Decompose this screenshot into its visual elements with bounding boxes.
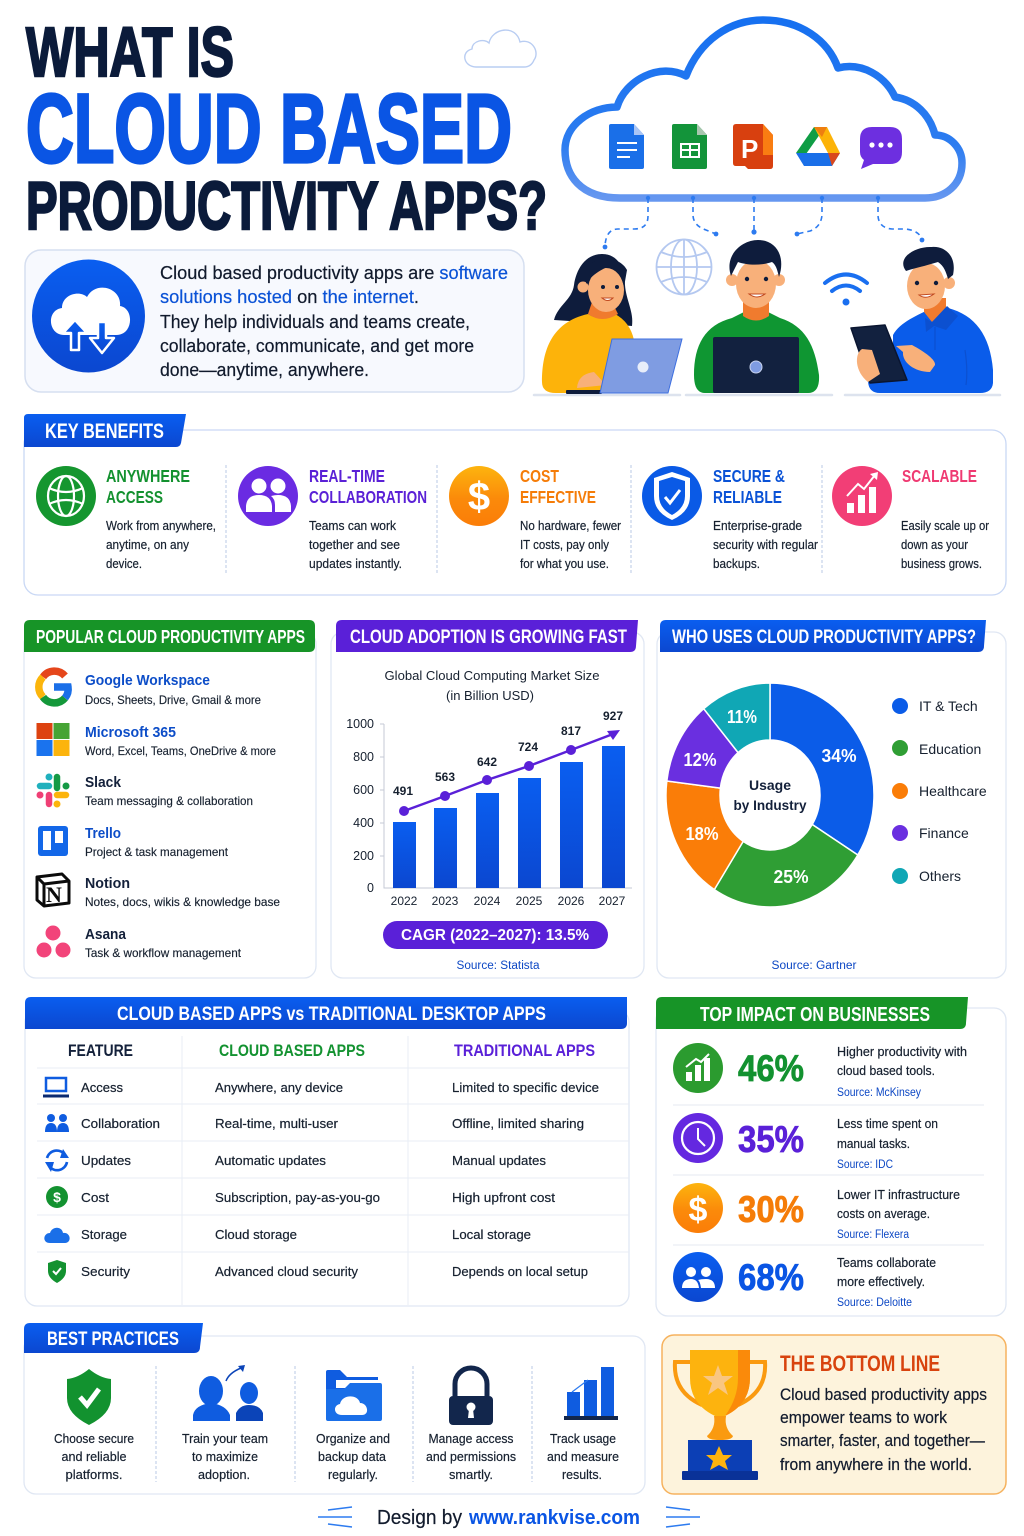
x axis labels: 2023 — [432, 894, 459, 908]
heading: impact — [656, 997, 968, 1029]
callout: CAGR: CAGR (2022–2027): 13.5% — [401, 927, 589, 944]
heading: popular apps: POPULAR CLOUD PRODUCTIVITY APPS — [36, 626, 305, 647]
title: CLOUD BASED — [26, 74, 512, 183]
chart title: (in Billion USD) — [446, 688, 534, 703]
benefit: secure and reliable: Enterprise-grade — [713, 518, 802, 533]
row: access — [43, 1078, 599, 1096]
heading: comparison: CLOUD BASED APPS vs TRADITIONAL DESKTOP APPS — [117, 1003, 546, 1025]
app: slack — [36, 774, 253, 808]
title — [26, 13, 547, 244]
practice: secure platforms — [54, 1369, 134, 1482]
stat: 46%: 46% — [738, 1048, 804, 1089]
illustration: woman with laptop — [542, 254, 682, 394]
legend: IT & Tech — [919, 698, 978, 714]
practice: secure platforms: and reliable — [62, 1449, 126, 1464]
practice: track usage: results. — [562, 1467, 602, 1482]
row: cost: Cost — [81, 1190, 109, 1205]
benefit: scalable: Easily scale up or — [901, 518, 990, 533]
trend line: 491 — [393, 784, 413, 798]
practice: train team — [182, 1365, 268, 1482]
row: cost: Subscription, pay-as-you-go — [215, 1190, 380, 1205]
y axis: 0 — [367, 881, 374, 895]
row: security: Depends on local setup — [452, 1264, 588, 1279]
stat: 35%: Less time spent on — [837, 1116, 938, 1131]
practice: organize data: Organize and — [316, 1431, 390, 1446]
x axis labels: 2022 — [391, 894, 418, 908]
icon: wifi — [825, 274, 867, 306]
text block: definition: They help individuals and teams create, — [160, 312, 470, 332]
column headers: FEATURE — [68, 1042, 133, 1060]
panel: who uses cloud apps — [657, 620, 1006, 978]
benefit: anywhere access: device. — [106, 556, 142, 571]
practice: track usage: Track usage — [550, 1431, 616, 1446]
legend: Others — [919, 868, 961, 884]
practice: manage access: and permissions — [426, 1449, 516, 1464]
benefit: secure and reliable: SECURE & — [713, 466, 785, 486]
row: cost — [46, 1186, 555, 1208]
heading: popular apps — [24, 620, 315, 652]
panel: the bottom line: THE BOTTOM LINE — [780, 1351, 940, 1376]
illustration: cloud with app icons — [565, 20, 962, 198]
benefit: real-time collaboration: COLLABORATION — [309, 487, 427, 507]
row: updates: Manual updates — [452, 1153, 547, 1168]
x axis labels: 2025 — [516, 894, 543, 908]
stat: 46%: Source: McKinsey — [837, 1087, 921, 1099]
app: google workspace: Docs, Sheets, Drive, Gmail & more — [85, 693, 261, 707]
heading: best practices — [24, 1323, 203, 1353]
benefit: real-time collaboration: Teams can work — [309, 518, 396, 533]
text block: bottom line: from anywhere in the world. — [780, 1456, 972, 1474]
x axis labels: 2026 — [558, 894, 585, 908]
trend line — [393, 709, 623, 816]
practice: organize data: backup data — [318, 1449, 387, 1464]
stat: 68%: Source: Deloitte — [837, 1297, 912, 1309]
heading: key benefits: KEY BENEFITS — [45, 420, 164, 443]
heading: who uses — [660, 620, 986, 652]
stat: 30%: costs on average. — [837, 1206, 930, 1221]
icon: trophy — [675, 1350, 765, 1480]
y axis: 400 — [353, 816, 374, 830]
heading: comparison — [25, 997, 627, 1029]
text block: definition: done—anytime, anywhere. — [160, 360, 369, 380]
practice: secure platforms: platforms. — [66, 1467, 122, 1482]
practice: manage access: Manage access — [428, 1431, 514, 1446]
illustration: man with tablet — [851, 247, 993, 393]
stat: 30%: 30% — [738, 1189, 804, 1230]
y axis: 800 — [353, 750, 374, 764]
panel: popular cloud productivity apps — [24, 620, 316, 978]
ground shadows — [534, 394, 1000, 396]
legend: Education — [919, 741, 981, 757]
app: notion: Notes, docs, wikis & knowledge base — [85, 895, 280, 909]
stat: 46%: cloud based tools. — [837, 1063, 935, 1078]
panel: top impact on businesses — [656, 997, 1006, 1316]
row: updates: Updates — [81, 1153, 132, 1168]
legend: Finance — [919, 825, 969, 841]
benefit: anywhere access: ACCESS — [106, 487, 163, 507]
app: notion: N — [46, 882, 62, 907]
row: cost: High upfront cost — [452, 1190, 555, 1205]
app: trello: Trello — [85, 825, 121, 842]
donut chart: Usage — [749, 777, 791, 793]
panel: the bottom line — [662, 1335, 1006, 1494]
benefit: scalable: business grows. — [901, 556, 982, 571]
column headers: TRADITIONAL APPS — [454, 1042, 595, 1060]
panel: key benefits — [24, 414, 1006, 595]
icon: docs — [609, 124, 644, 169]
row: access: Access — [81, 1080, 123, 1095]
trend line: 817 — [561, 724, 581, 738]
x axis labels: 2024 — [474, 894, 501, 908]
practice: organize data — [316, 1370, 390, 1482]
icon: globe — [656, 240, 712, 294]
app: microsoft 365 — [36, 723, 276, 758]
app: microsoft 365: Microsoft 365 — [85, 724, 176, 741]
column headers: CLOUD BASED APPS — [219, 1042, 365, 1060]
y axis: 600 — [353, 783, 374, 797]
benefit: scalable — [832, 466, 990, 571]
legend — [892, 698, 987, 884]
text block: definition: Cloud based productivity apps are software — [160, 263, 508, 283]
row: storage: Cloud storage — [215, 1227, 297, 1242]
app: slack: Slack — [85, 774, 122, 791]
title: WHAT IS — [26, 13, 234, 91]
benefit: scalable: SCALABLE — [902, 466, 977, 486]
stat: 68%: Teams collaborate — [837, 1255, 936, 1270]
practice: track usage: and measure — [547, 1449, 619, 1464]
benefit: secure and reliable — [642, 466, 819, 571]
icon: drive — [796, 127, 840, 166]
practice: train team: Train your team — [182, 1431, 268, 1446]
benefit: cost effective: EFFECTIVE — [520, 487, 596, 507]
practice: manage access: smartly. — [449, 1467, 493, 1482]
app: google workspace — [39, 671, 261, 707]
source: Source: Statista — [456, 960, 540, 972]
y axis: 200 — [353, 849, 374, 863]
app: asana: Task & workflow management — [85, 946, 242, 960]
text block: bottom line: smarter, faster, and together— — [780, 1432, 985, 1450]
benefit: anywhere access: anytime, on any — [106, 537, 189, 552]
benefit: cost effective: IT costs, pay only — [520, 537, 609, 552]
app: slack: Team messaging & collaboration — [85, 794, 253, 808]
legend: Healthcare — [919, 783, 987, 799]
benefit: cost effective: COST — [520, 466, 559, 486]
row: storage — [44, 1227, 531, 1243]
benefit: secure and reliable: security with regular — [713, 537, 819, 552]
practice: train team: to maximize — [192, 1449, 258, 1464]
text block: bottom line: Cloud based productivity apps — [780, 1386, 987, 1404]
panel: cloud adoption chart — [331, 620, 644, 978]
row: collaboration: Real-time, multi-user — [215, 1116, 339, 1131]
benefit: cost effective: for what you use. — [520, 556, 609, 571]
benefit: real-time collaboration: REAL-TIME — [309, 466, 385, 486]
dashed connectors — [603, 196, 924, 249]
x axis labels — [391, 894, 626, 908]
donut chart: 34% — [822, 746, 856, 766]
benefit: real-time collaboration: together and see — [309, 537, 400, 552]
row: collaboration — [45, 1114, 584, 1132]
text block: bottom line — [780, 1386, 987, 1474]
donut chart: 18% — [686, 824, 718, 844]
column headers — [68, 1042, 595, 1060]
text block: bottom line: empower teams to work — [780, 1409, 948, 1427]
chart title — [384, 668, 600, 703]
donut chart: 11% — [727, 707, 757, 727]
row: collaboration: Offline, limited sharing — [452, 1116, 584, 1131]
stat: 35% — [673, 1113, 938, 1171]
app: asana: Asana — [85, 926, 127, 943]
app: notion: Notion — [85, 875, 130, 892]
app: trello: Project & task management — [85, 845, 229, 859]
donut chart: 12% — [684, 750, 716, 770]
practice: track usage — [547, 1367, 619, 1482]
practice: manage access — [426, 1368, 516, 1482]
row: cost: $ — [53, 1189, 61, 1205]
trend line: 724 — [518, 740, 538, 754]
benefit: secure and reliable: backups. — [713, 556, 760, 571]
icon: cloud transfer — [32, 260, 145, 372]
y axis: 1000 — [346, 717, 374, 731]
trend line: 642 — [477, 755, 497, 769]
app: google workspace: Google Workspace — [85, 672, 210, 689]
stat: 30%: $ — [689, 1191, 708, 1229]
x axis labels: 2027 — [599, 894, 626, 908]
row: security — [48, 1260, 588, 1283]
stat: 30% — [673, 1183, 960, 1241]
footer: www.rankvise.com — [468, 1507, 640, 1529]
illustration: man with laptop — [694, 240, 819, 393]
row: security: Security — [81, 1264, 131, 1279]
row: security: Advanced cloud security — [215, 1264, 358, 1279]
app: trello — [38, 825, 229, 859]
stat: 68% — [673, 1252, 936, 1309]
heading: key benefits — [24, 414, 186, 447]
heading: adoption — [336, 620, 638, 652]
benefit: real-time collaboration — [238, 466, 427, 571]
panel: best practices — [24, 1323, 645, 1494]
row: storage: Storage — [81, 1227, 127, 1242]
callout: CAGR — [383, 921, 608, 949]
cloud outline — [565, 20, 962, 198]
footer — [318, 1507, 700, 1529]
stat: 30%: Lower IT infrastructure — [837, 1187, 960, 1202]
stat: 35%: manual tasks. — [837, 1136, 910, 1151]
row: storage: Local storage — [452, 1227, 531, 1242]
benefit: cost effective: $ — [468, 475, 490, 519]
heading: adoption: CLOUD ADOPTION IS GROWING FAST — [350, 627, 627, 648]
benefit: anywhere access: ANYWHERE — [106, 466, 190, 486]
text block: definition: collaborate, communicate, and get more — [160, 336, 474, 356]
bar chart — [393, 746, 625, 888]
text block: definition — [160, 263, 508, 380]
row: updates: Automatic updates — [215, 1153, 327, 1168]
source: Source: Gartner — [772, 960, 857, 972]
row: collaboration: Collaboration — [81, 1116, 160, 1131]
benefit: anywhere access — [36, 466, 216, 571]
row: access: Anywhere, any device — [215, 1080, 343, 1095]
benefit: secure and reliable: RELIABLE — [713, 487, 782, 507]
chart title: Global Cloud Computing Market Size — [384, 668, 600, 683]
footer: Design by — [377, 1507, 462, 1529]
icon: powerpoint — [733, 124, 773, 169]
app: microsoft 365: Word, Excel, Teams, OneDrive & more — [85, 744, 276, 758]
icon: small cloud outline — [465, 30, 536, 67]
stat: 30%: Source: Flexera — [837, 1229, 910, 1241]
trend line: 563 — [435, 770, 455, 784]
app: asana — [36, 926, 242, 960]
donut chart: 25% — [774, 867, 808, 887]
stat: 46% — [673, 1043, 967, 1099]
stat: 35%: 35% — [738, 1119, 804, 1160]
benefit: cost effective — [449, 466, 622, 571]
donut chart — [666, 683, 874, 907]
stat: 46%: Higher productivity with — [837, 1044, 967, 1059]
heading: best practices: BEST PRACTICES — [47, 1328, 179, 1350]
row: updates — [45, 1149, 547, 1172]
app: notion — [37, 874, 280, 909]
trend line: 927 — [603, 709, 623, 723]
icon: powerpoint: P — [741, 134, 758, 164]
panel: intro — [25, 250, 524, 392]
benefit: cost effective: No hardware, fewer — [520, 518, 622, 533]
benefit: scalable: down as your — [901, 537, 969, 552]
icon: chat — [860, 127, 902, 169]
donut chart: by Industry — [734, 797, 807, 813]
stat: 68%: more effectively. — [837, 1274, 925, 1289]
text block: definition: solutions hosted on the internet. — [160, 287, 419, 307]
y axis — [346, 717, 632, 895]
stat: 68%: 68% — [738, 1257, 804, 1298]
practice: secure platforms: Choose secure — [54, 1431, 134, 1446]
practice: organize data: regularly. — [328, 1467, 378, 1482]
stat: 35%: Source: IDC — [837, 1159, 893, 1171]
heading: impact: TOP IMPACT ON BUSINESSES — [700, 1004, 930, 1026]
row: access: Limited to specific device — [452, 1080, 599, 1095]
title: PRODUCTIVITY APPS? — [26, 168, 547, 244]
panel: comparison table — [25, 997, 629, 1306]
benefit: anywhere access: Work from anywhere, — [106, 518, 216, 533]
icon: sheets — [672, 124, 707, 169]
practice: train team: adoption. — [198, 1467, 250, 1482]
benefit: real-time collaboration: updates instantly. — [309, 556, 402, 571]
